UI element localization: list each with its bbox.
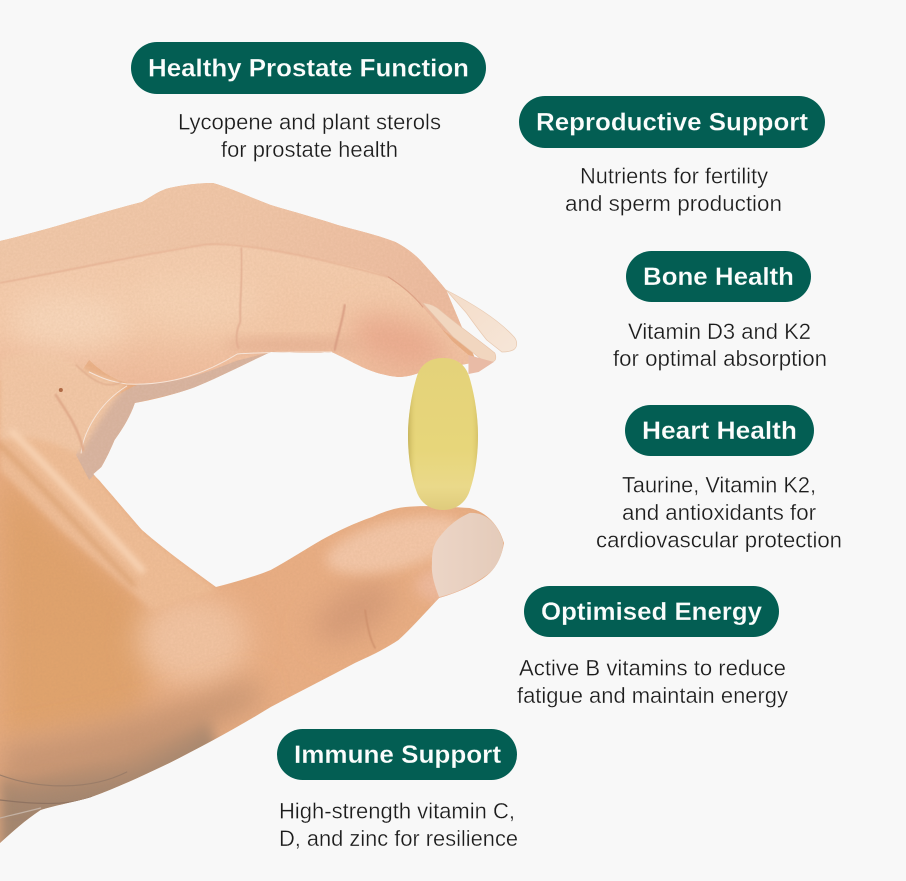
callout: Heart Health bbox=[596, 405, 842, 552]
description: and antioxidants for bbox=[622, 500, 816, 525]
shading: thumb joint bbox=[318, 583, 392, 642]
pill bbox=[408, 358, 478, 510]
skin texture bbox=[0, 189, 402, 552]
palm web: fold under index finger bbox=[0, 367, 126, 454]
shading: palm highlight bbox=[137, 595, 248, 685]
pill heading: Optimised Energy bbox=[541, 598, 762, 626]
pill heading: Immune Support bbox=[294, 741, 502, 769]
pill heading bbox=[625, 405, 814, 456]
shading: grey lower edge bbox=[0, 720, 220, 843]
description: Nutrients for fertility bbox=[580, 164, 768, 188]
pill heading bbox=[131, 42, 486, 94]
thumbnail bbox=[432, 513, 503, 597]
description: Active B vitamins to reduce bbox=[519, 656, 786, 680]
pill heading: Bone Health bbox=[643, 263, 794, 291]
callout: Healthy Prostate Function bbox=[131, 42, 486, 162]
description: Lycopene and plant sterols bbox=[178, 110, 441, 134]
shading: tan back of hand bbox=[0, 483, 154, 735]
description: D, and zinc for resilience bbox=[279, 826, 518, 851]
creases bbox=[0, 244, 423, 818]
fingernail: middle finger bbox=[446, 290, 517, 352]
callout: Immune Support bbox=[277, 729, 518, 851]
description bbox=[178, 110, 441, 162]
shading: thumb top bbox=[324, 512, 459, 578]
ring finger shadow layer bbox=[76, 350, 332, 480]
description: for optimal absorption bbox=[613, 346, 827, 371]
pill heading bbox=[626, 251, 811, 302]
fingertip under nail bbox=[468, 355, 494, 374]
pill heading bbox=[277, 729, 517, 780]
description: cardiovascular protection bbox=[596, 528, 842, 552]
pill heading: Heart Health bbox=[642, 417, 797, 445]
age spot bbox=[59, 388, 63, 392]
callout: Reproductive Support bbox=[519, 96, 825, 216]
index finger layer bbox=[0, 250, 468, 384]
shading: band above tan area bbox=[0, 438, 210, 607]
pill heading: Healthy Prostate Function bbox=[148, 54, 469, 82]
description bbox=[596, 472, 842, 552]
fingernail: index finger bbox=[423, 303, 496, 362]
description: and sperm production bbox=[565, 191, 782, 216]
pill heading: Reproductive Support bbox=[536, 108, 809, 136]
pill heading bbox=[519, 96, 825, 148]
description bbox=[565, 164, 782, 216]
pill heading bbox=[524, 586, 779, 637]
description: High-strength vitamin C, bbox=[279, 798, 515, 824]
description bbox=[517, 656, 788, 708]
description: fatigue and maintain energy bbox=[517, 683, 788, 708]
callout: Optimised Energy bbox=[517, 586, 788, 708]
description bbox=[613, 319, 827, 371]
description: for prostate health bbox=[221, 137, 398, 162]
description bbox=[279, 798, 518, 851]
shading: fingertip blush bbox=[347, 308, 446, 370]
middle finger layer bbox=[0, 183, 462, 337]
illustration: hand holding pill bbox=[0, 170, 527, 860]
hand base bbox=[0, 170, 527, 860]
callout: Bone Health bbox=[613, 251, 827, 371]
description: Vitamin D3 and K2 bbox=[628, 319, 811, 344]
description: Taurine, Vitamin K2, bbox=[622, 472, 816, 498]
